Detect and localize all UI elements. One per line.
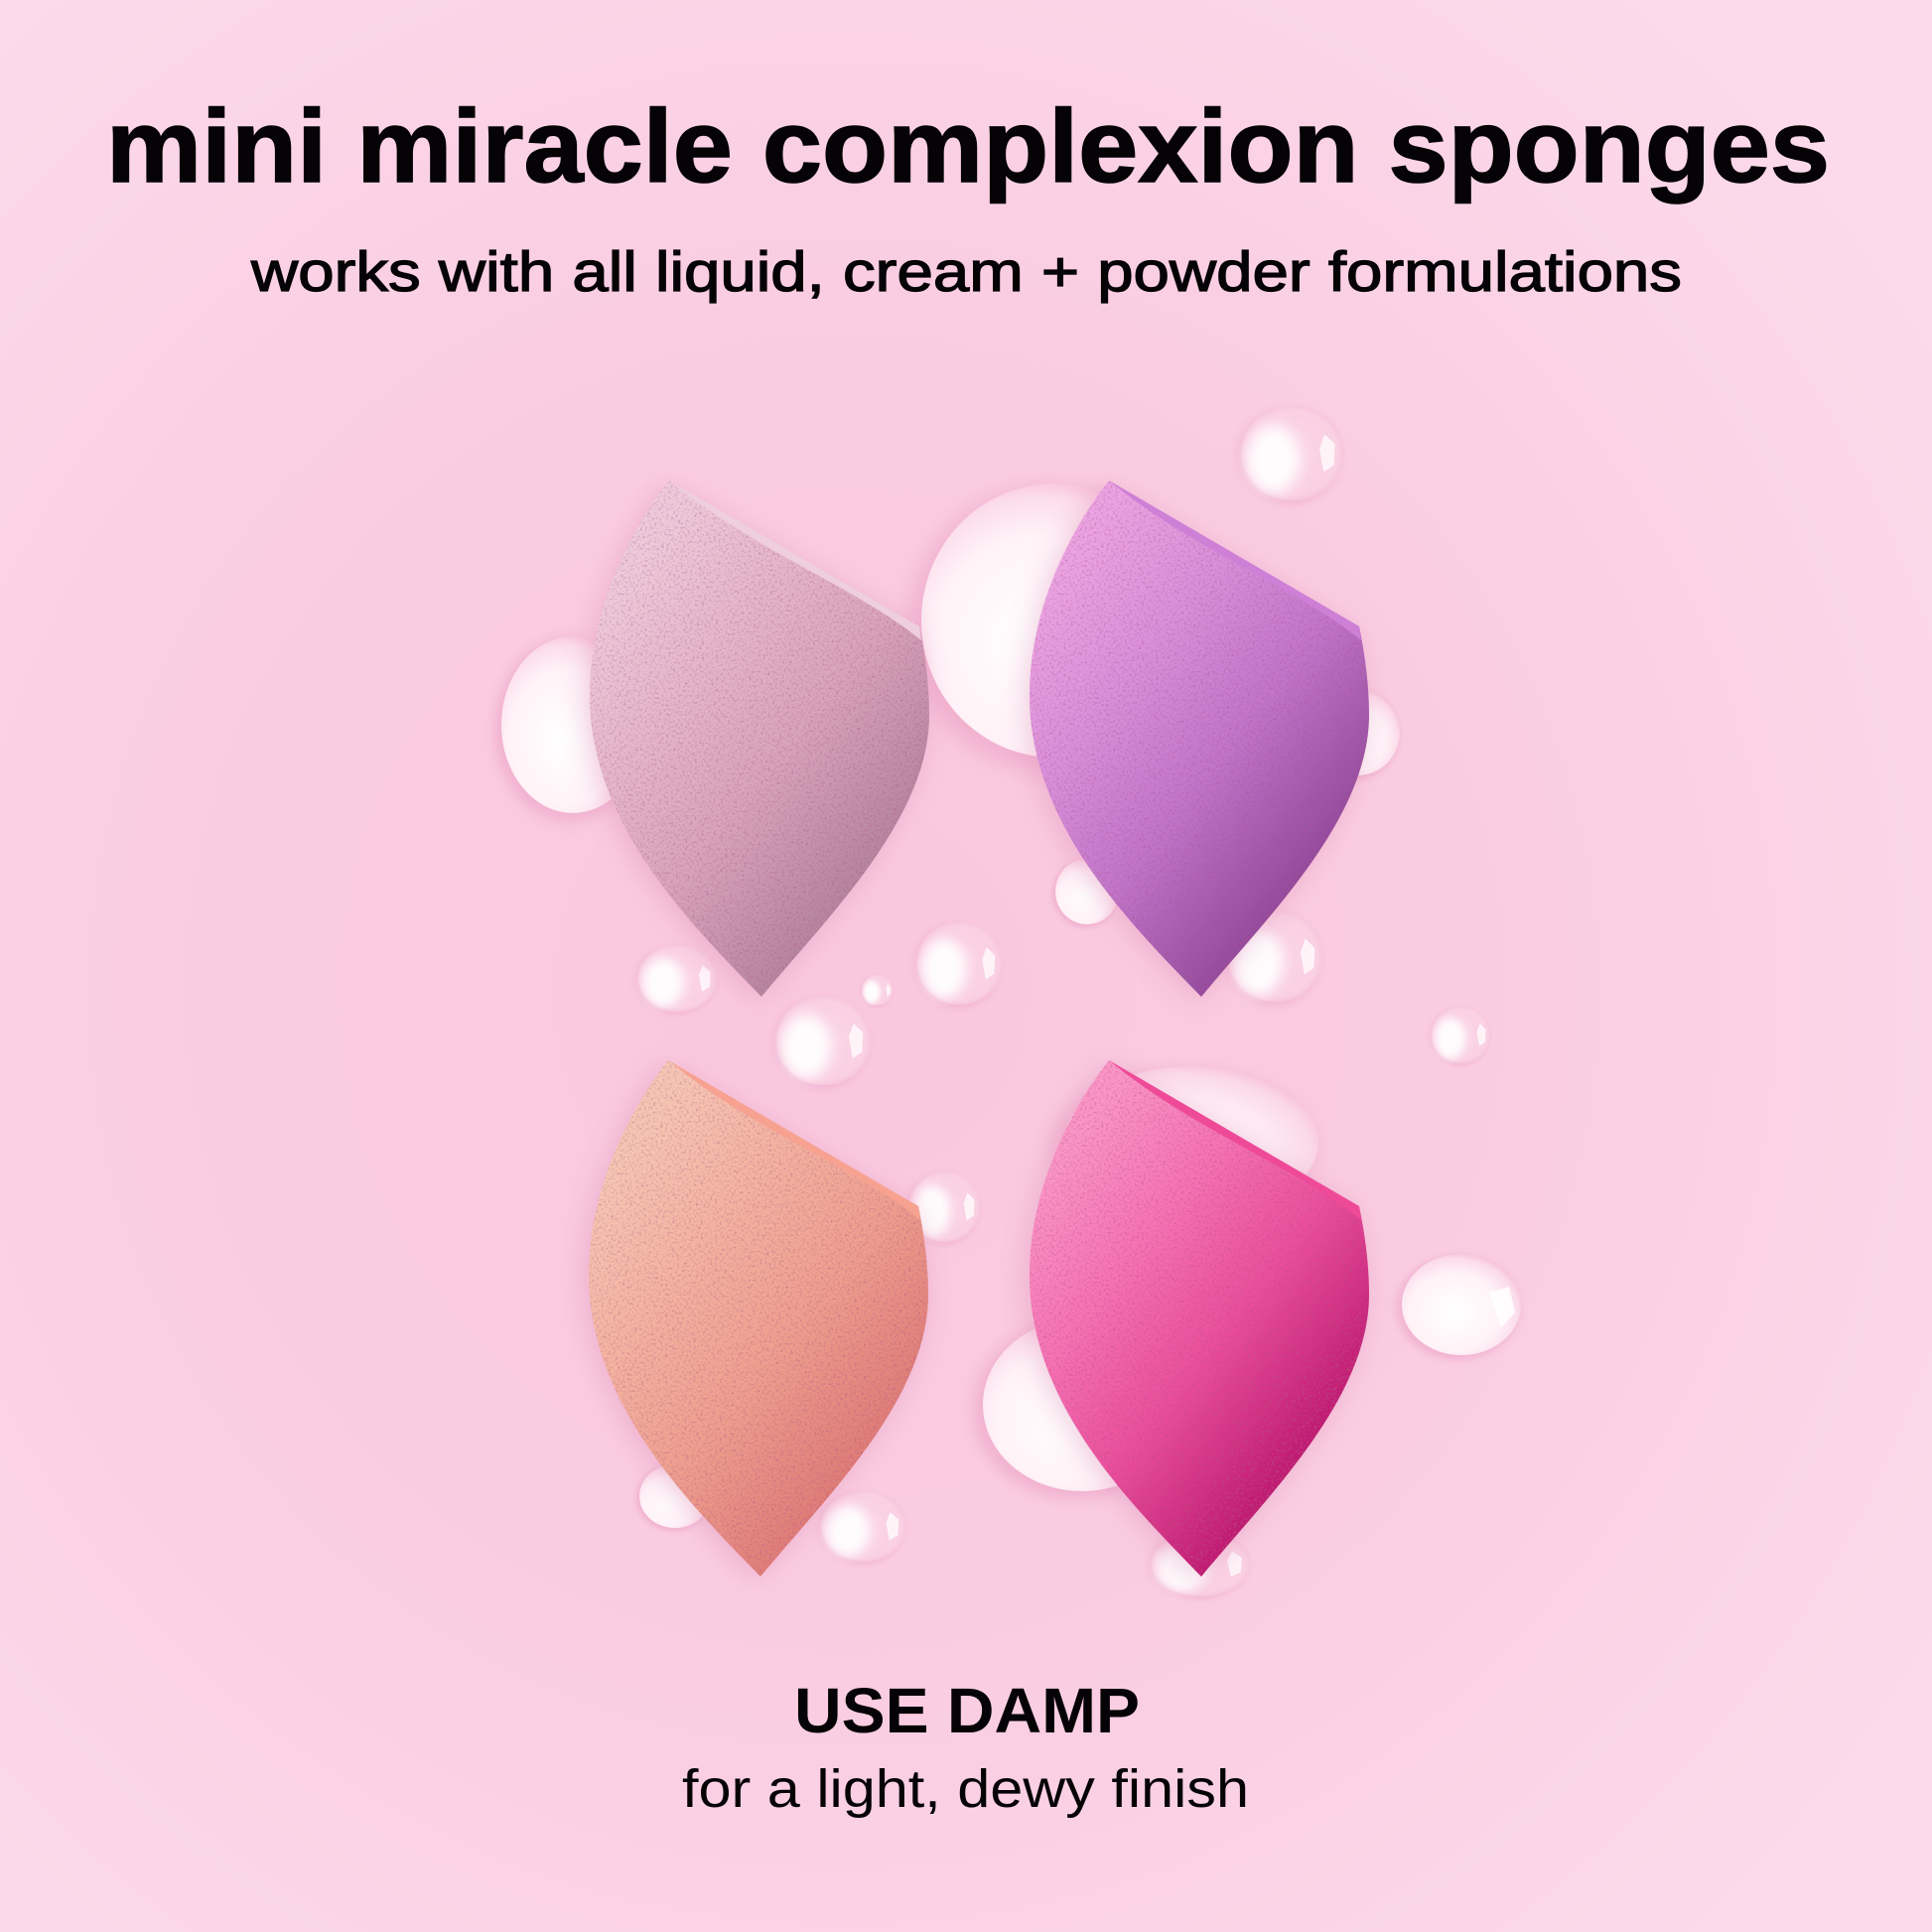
- usage heading: USE DAMP: [794, 1675, 1140, 1746]
- drop: large centre: [909, 483, 1187, 769]
- drop: right of peach sponge: [905, 1171, 981, 1246]
- drop: far right small: [1429, 1006, 1491, 1066]
- drop: pink sponge tip: [1147, 1531, 1251, 1599]
- sponge: hot pink: [1026, 1060, 1369, 1581]
- drop: right large highlight: [1489, 1287, 1515, 1327]
- drop: tiny centre: [860, 974, 894, 1008]
- drop: top right: [1236, 405, 1344, 505]
- drop: purple sponge tip: [1223, 910, 1323, 1007]
- usage description: for a light, dewy finish: [682, 1759, 1249, 1819]
- sponge: mauve: [586, 481, 929, 1001]
- drop: under purple sponge: [1052, 859, 1119, 927]
- drop: right of purple sponge: [1312, 688, 1400, 779]
- water drops: [495, 405, 1521, 1599]
- drop: behind pink sponge top: [1052, 1066, 1318, 1224]
- drop: peach sponge bottom left: [636, 1464, 711, 1531]
- drop: mauve sponge tip: [634, 944, 718, 1015]
- title: mini miracle complexion sponges: [106, 89, 1830, 205]
- sponge: peach: [585, 1060, 928, 1581]
- sponge: purple: [1026, 481, 1369, 1001]
- subtitle: works with all liquid, cream + powder formulations: [250, 240, 1682, 304]
- drop: right large: [1397, 1254, 1521, 1360]
- drop: under pink sponge left: [974, 1318, 1181, 1499]
- drop: middle upper: [913, 921, 1003, 1009]
- drop: peach sponge tip: [817, 1490, 906, 1566]
- drop: middle lower: [771, 996, 872, 1090]
- drop: large left: [495, 636, 644, 821]
